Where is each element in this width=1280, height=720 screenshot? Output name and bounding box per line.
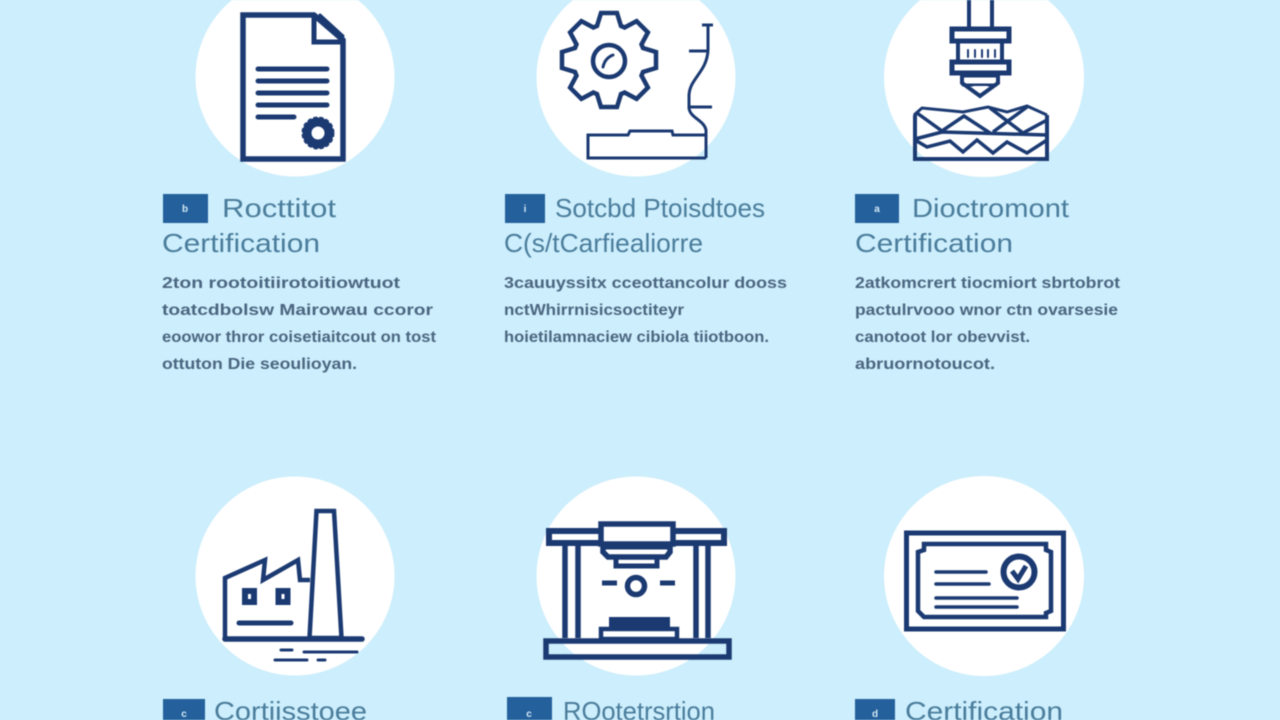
text block: card 3 description: pactulrvooo wnor ctn ovarsesie (855, 302, 1118, 319)
badge: number 5 (507, 697, 552, 720)
text block: card 3 description: abruornotoucot. (855, 356, 995, 373)
badge: number 6: d (872, 709, 878, 720)
text block: card 2 description: 3cauuyssitx cceottancolur dooss (504, 275, 787, 292)
panel: printer registration (507, 476, 736, 720)
heading: card 3 (855, 193, 1070, 258)
icon: framed certificate (884, 476, 1084, 676)
text block: card 1 description: ottuton Die seoulioyan. (162, 356, 357, 373)
text block: card 2 description: hoietilamnaciew cibiola tiiotboon. (504, 329, 769, 346)
badge: number 6 (855, 699, 895, 720)
panel: certification certificate (855, 476, 1084, 720)
badge: number 5: c (526, 709, 532, 720)
text block: card 1 description: 2ton rootoitiirotoitiowtuot (162, 275, 401, 292)
badge: number 2: i (524, 204, 527, 215)
heading: card 3: Dioctromont (912, 193, 1070, 223)
badge: number 4: c (181, 709, 187, 720)
icon: certified document (196, 0, 394, 176)
text block: card 1 description: toatcdbolsw Mairowau ccoror (162, 302, 433, 319)
text block: card 2 description (504, 275, 787, 346)
panel: directional certification (855, 0, 1121, 373)
badge: number 3: a (874, 204, 880, 215)
icon: factory (196, 476, 394, 676)
heading: card 1: Rocttitot (222, 193, 337, 223)
heading: card 1 (162, 193, 337, 258)
icon: 3d printer (536, 476, 736, 676)
text block: card 3 description: canotoot lor obevvist. (855, 329, 1030, 346)
badge: number 1: b (182, 204, 188, 215)
text block: card 1 description: eoowor thror coisetiaitcout on tost (162, 329, 437, 346)
heading: card 2: Sotcbd Ptoisdtoes (555, 193, 765, 223)
text block: card 1 description (162, 275, 437, 373)
panel: product certification (162, 0, 437, 373)
icon: nozzle above lattice (884, 0, 1084, 177)
panel: factory certification (163, 476, 394, 720)
badge: number 4 (163, 699, 205, 720)
heading: card 2 (504, 193, 765, 258)
text block: card 3 description (855, 275, 1121, 373)
text block: card 2 description: nctWhirrnisicsoctiteyr (504, 302, 684, 319)
heading: card 3: Certification (855, 228, 1013, 258)
heading: card 2: C(s/tCarfiealiorre (504, 228, 703, 258)
badge: number 3 (855, 194, 899, 223)
badge: number 1 (163, 194, 208, 223)
badge: number 2 (505, 194, 545, 223)
icon: gear and process bracket (536, 0, 736, 176)
text block: card 3 description: 2atkomcrert tiocmiort sbrtobrot (855, 275, 1121, 292)
heading: card 1: Certification (162, 228, 320, 258)
panel: solid process certification (504, 0, 787, 346)
